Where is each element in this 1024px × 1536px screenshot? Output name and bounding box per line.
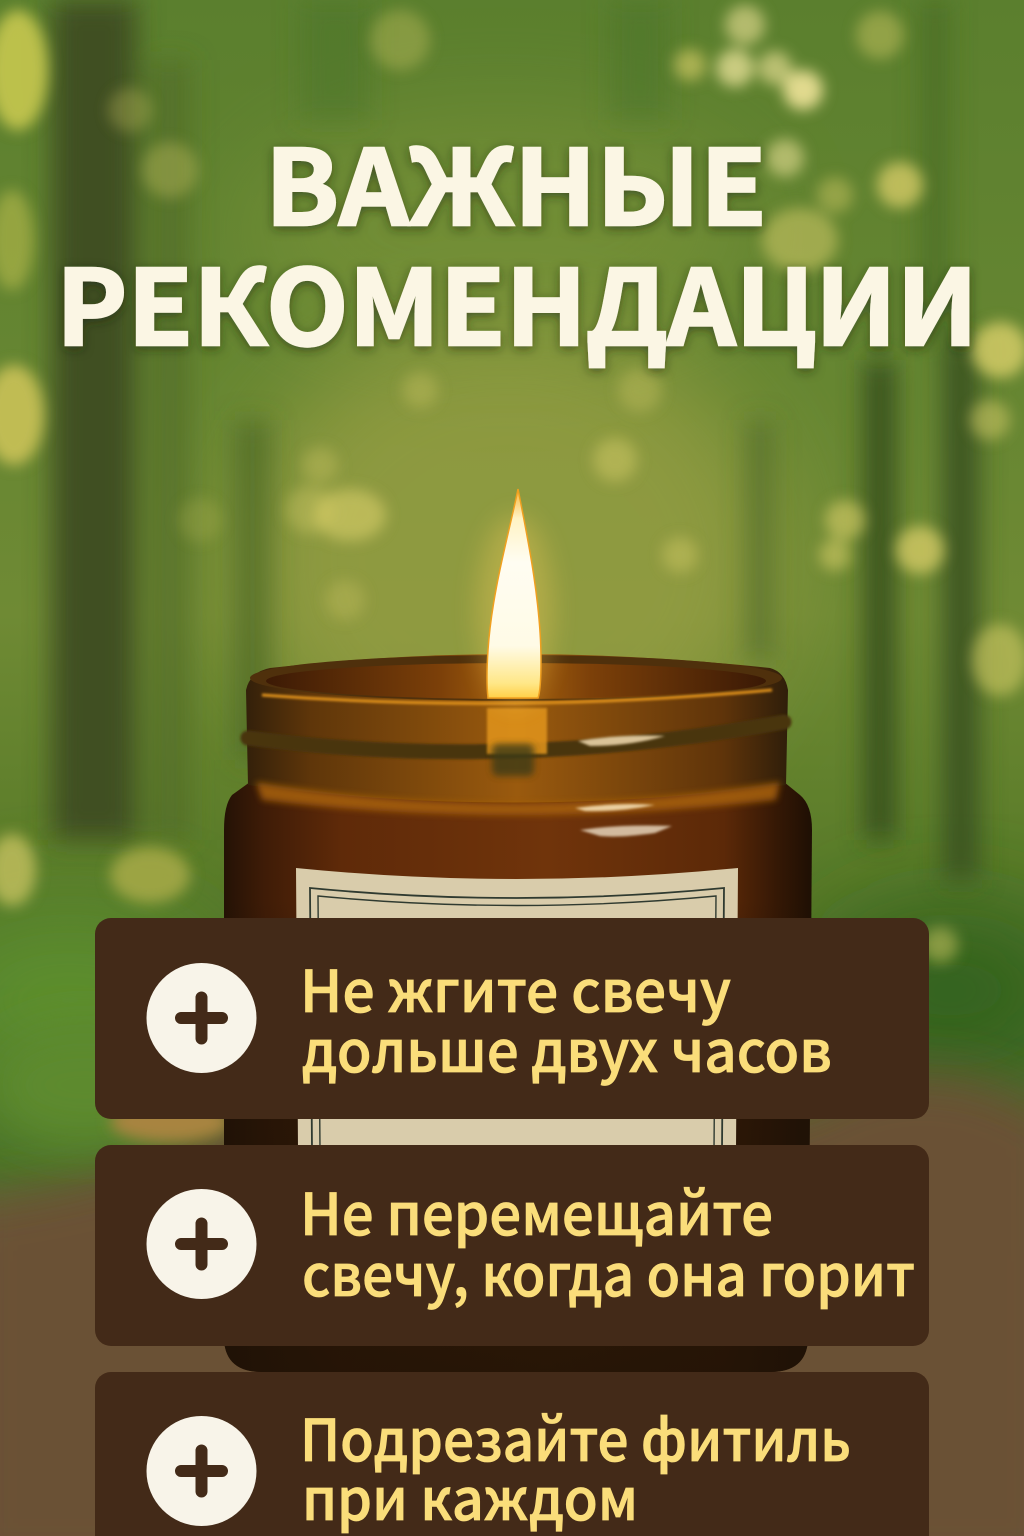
- card 2: [95, 1145, 929, 1346]
- jar neck: [246, 654, 788, 802]
- text: tip 3: при каждом: [302, 1453, 638, 1536]
- title: [56, 104, 978, 375]
- text: tip 1: дольше двух часов: [302, 1005, 832, 1089]
- text: tip 2: Не перемещайте: [300, 1168, 773, 1252]
- text: tip 2: свечу, когда она горит: [302, 1229, 915, 1313]
- flame: [487, 489, 541, 698]
- card 3: [95, 1372, 929, 1536]
- jar shoulder glow: [256, 782, 780, 815]
- rim highlight: [262, 690, 772, 703]
- wick seen through glass: [492, 744, 534, 776]
- text: tip 1: Не жгите свечу: [300, 945, 731, 1029]
- candle label: [296, 868, 738, 1150]
- card 1: [95, 918, 929, 1119]
- text: tip 3: [300, 1394, 851, 1536]
- flame reflection on neck: [487, 708, 547, 754]
- candle jar: [224, 654, 812, 1372]
- title: РЕКОМЕНДАЦИИ: [56, 224, 978, 375]
- text: tip 1: [300, 945, 832, 1089]
- icon: plus 3: [146, 1416, 256, 1526]
- neck thread: [248, 722, 784, 752]
- jar opening: [250, 655, 782, 701]
- icon: plus 2: [146, 1189, 256, 1299]
- jar body: [224, 782, 812, 1372]
- text: tip 2: [300, 1168, 915, 1313]
- flame glow: [477, 515, 553, 705]
- title: ВАЖНЫЕ: [265, 104, 767, 255]
- text: tip 3: Подрезайте фитиль: [300, 1394, 851, 1478]
- icon: plus 1: [146, 963, 256, 1073]
- jar inner wall: [266, 663, 766, 699]
- glass highlights: [575, 736, 672, 837]
- jar lower shading: [224, 900, 812, 1372]
